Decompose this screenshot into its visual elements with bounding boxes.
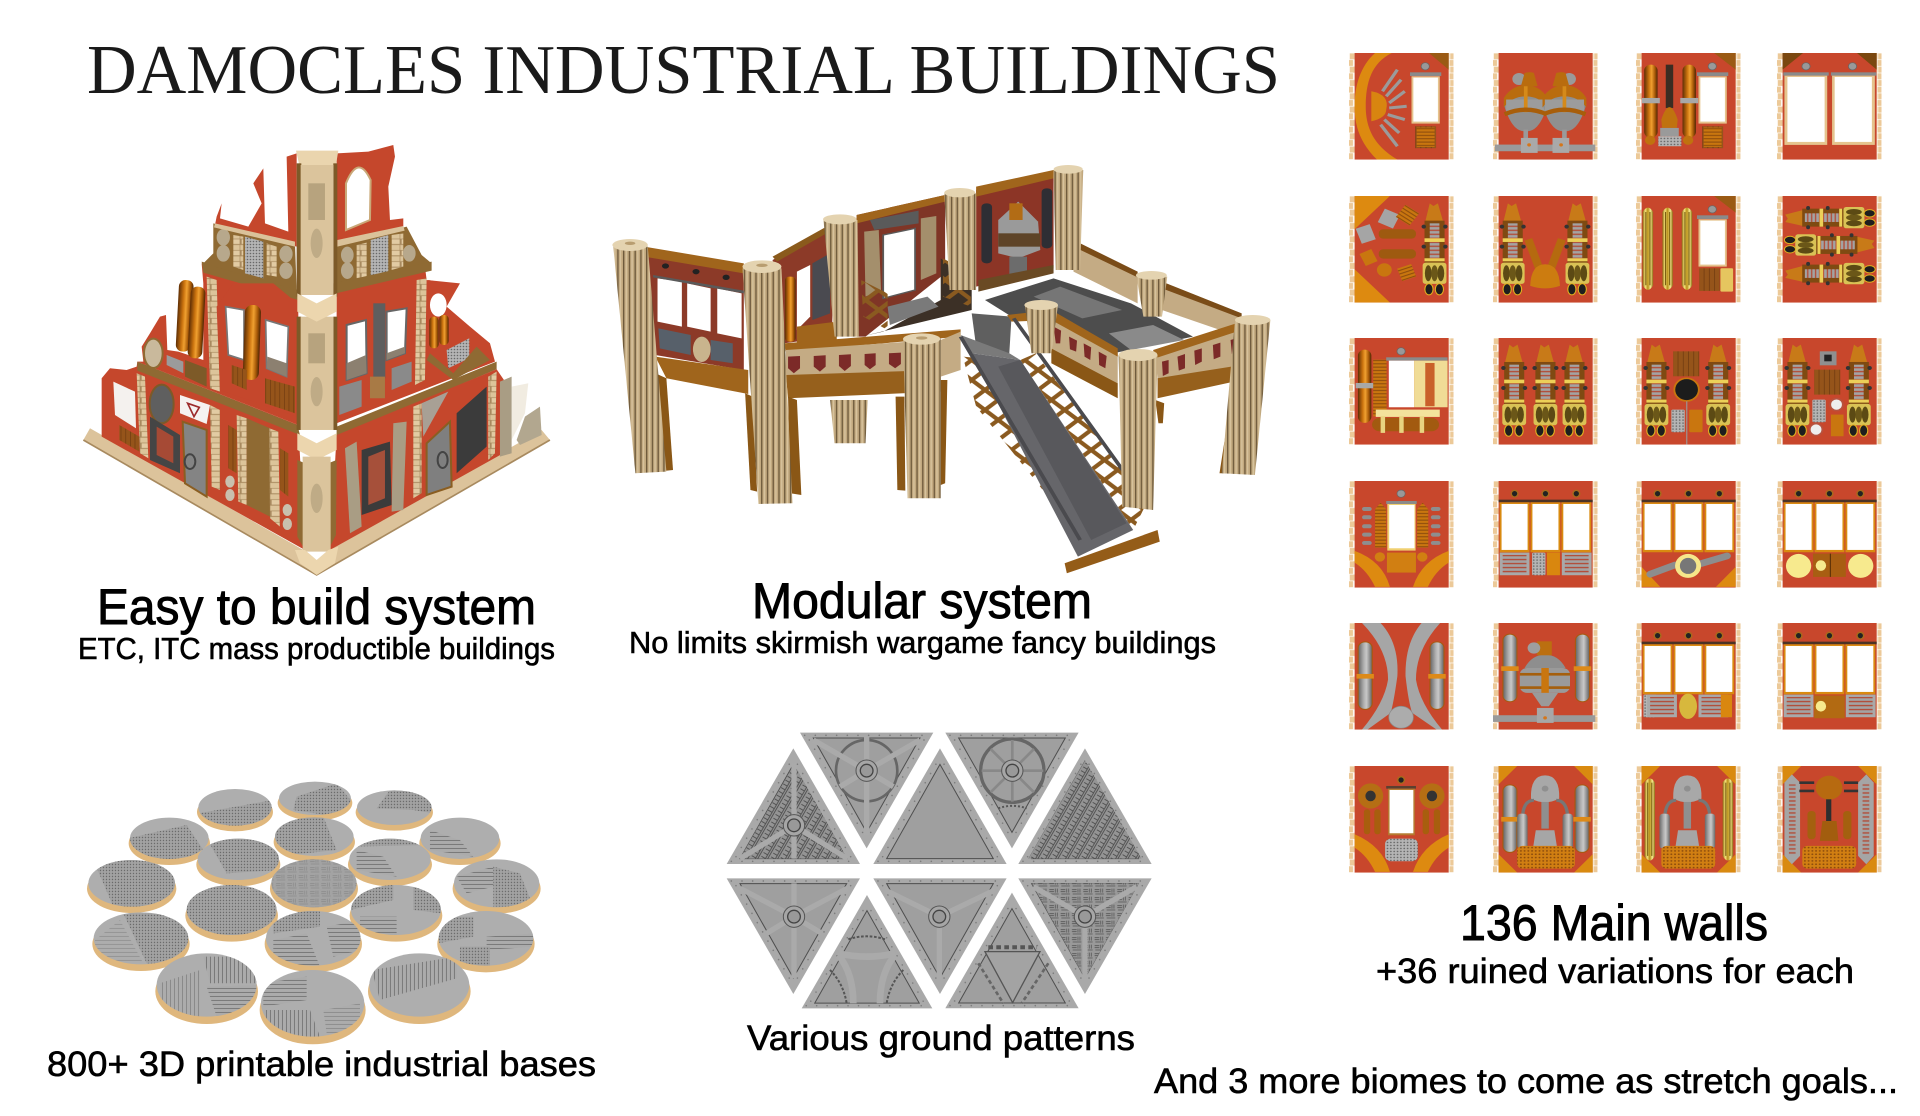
base 4 [128,818,210,865]
base 3 [356,790,433,831]
wall tile r4c3 [1636,481,1741,588]
base 10 [270,858,358,914]
wall tile r1c2 [1493,53,1598,160]
base 13 [350,885,442,942]
triangle: crenellated up [945,893,1079,1008]
base 5 [273,817,355,862]
wall tile r2c2 [1493,196,1598,303]
triangle: plain up [873,748,1007,864]
wall tile r3c3 [1636,338,1741,445]
wall tile r3c2 [1493,338,1598,445]
heading: modular system: Modular system [752,573,1092,629]
wall tile r1c4 [1777,53,1882,160]
base 9 [87,860,176,913]
subheading: no limits: No limits skirmish wargame fancy buildings [629,625,1216,660]
wall tile r5c2 [1493,623,1598,730]
triangle: wheel down [800,733,933,848]
triangle: maze hub down [1018,878,1152,994]
base 15 [265,910,362,972]
wall tile r3c4 [1777,338,1882,445]
base 2 [278,782,353,821]
triangle: gears up [802,895,932,1008]
wall tile r6c2 [1493,766,1598,873]
subheading: mass productible: ETC, ITC mass productible buildings [78,631,555,666]
wall tile r1c3 [1636,53,1741,160]
base 16 [437,911,535,972]
triangle: six spoke down [727,878,860,994]
base 19 [368,953,471,1024]
base 7 [196,838,280,886]
triangle: three spoke down [873,878,1007,994]
base 14 [92,912,190,971]
caption: bases: 800+ 3D printable industrial bases [47,1045,596,1084]
heading: easy to build: Easy to build system [97,579,536,635]
wall tile r4c2 [1493,481,1598,588]
wall tile r2c4 [1777,196,1882,303]
wall tile r5c4 [1777,623,1882,730]
triangle: herringbone hub up [727,748,860,864]
title: DAMOCLES INDUSTRIAL BUILDINGS [87,32,1280,109]
panel: modular walkway building [612,165,1270,573]
wall tile r4c4 [1777,481,1882,588]
panel: wall tile grid [1349,53,1882,873]
wall tile r5c3 [1636,623,1741,730]
base 6 [419,818,501,865]
wall tile r5c1 [1349,623,1454,730]
base 18 [260,970,366,1044]
caption: ground patterns: Various ground patterns [747,1019,1135,1058]
base 12 [185,885,278,942]
panel: ground pattern triangles [727,733,1152,1008]
wall tile r6c4 [1777,766,1882,873]
wall tile r2c1 [1349,196,1454,303]
triangle: gear down [945,733,1079,848]
caption: stretch goals: And 3 more biomes to come as stretch goals... [1154,1062,1898,1101]
base 17 [155,953,258,1024]
wall tile r4c1 [1349,481,1454,588]
panel: ruined corner building [83,145,550,575]
wall tile r6c3 [1636,766,1741,873]
base 11 [453,859,541,914]
wall tile r2c3 [1636,196,1741,303]
wall tile r1c1 [1349,53,1454,160]
wall tile r6c1 [1349,766,1454,873]
triangle: herringbone up [1018,748,1152,864]
panel: industrial bases [87,782,541,1044]
wall tile r3c1 [1349,338,1454,445]
subheading: ruined variations: +36 ruined variations for each [1376,952,1854,991]
heading: main walls: 136 Main walls [1460,895,1768,951]
base 8 [348,838,432,886]
base 1 [197,789,273,831]
